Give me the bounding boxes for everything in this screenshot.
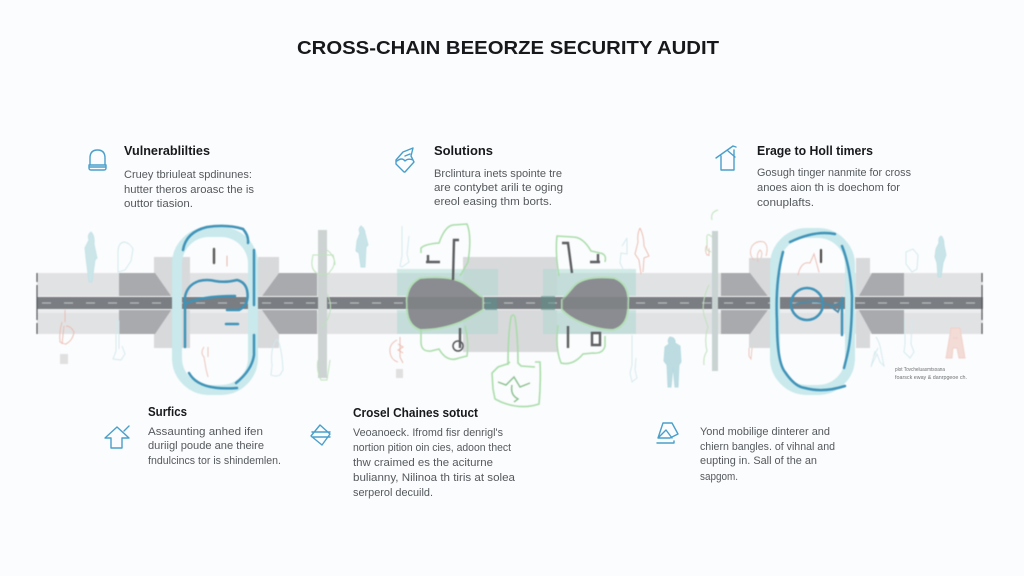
figure: red sketch centre right [635, 228, 649, 274]
dark gateway blocks [119, 273, 904, 334]
body text: serperol decuild. [353, 487, 433, 499]
body text [353, 427, 516, 499]
figure: teal person centre left [356, 226, 368, 267]
body text: sapgom. [700, 471, 738, 483]
right central clamp [541, 236, 628, 364]
right lock loop [775, 233, 852, 390]
icon: house [716, 146, 736, 170]
body text: anoes aion th is doechom for [757, 182, 900, 194]
body text: Veoanoeck. Ifromd fisr denrigl's [353, 427, 503, 439]
body text: outtor tiasion. [124, 198, 193, 210]
figure: red sketch centre left [390, 337, 403, 363]
tower base plates [154, 257, 870, 352]
left lock loop [177, 226, 254, 390]
body text: duriigl poude ane theire [148, 440, 264, 452]
tiny caption right: plot Tovcheluasmtsoana [895, 367, 946, 373]
left central clamp [407, 224, 497, 359]
body text: conuplafts. [757, 197, 814, 209]
figure: teal person left [85, 232, 97, 282]
body text: nortion pition oin cies, adoon thect [353, 442, 511, 454]
figure: blue sketch lower right narrow [904, 318, 914, 358]
figure: blue sketch lower centre right [630, 335, 637, 382]
body text [757, 167, 911, 209]
icon: bell [89, 150, 106, 170]
figure: base block centre left [396, 369, 403, 378]
icon: heart shield [396, 148, 414, 172]
figure: red mark lower loop [202, 347, 208, 377]
tiny caption right [895, 367, 967, 381]
body text: chiern bangles. of vihnal and [700, 441, 835, 453]
pale figure sketches [60, 226, 965, 387]
figure: pink letter shape [946, 328, 965, 358]
body text: Yond mobilige dinterer and [700, 426, 830, 438]
figure: teal person far right [935, 236, 946, 277]
figure: blue sketch upper right [906, 249, 918, 272]
heading: Solutions [434, 144, 493, 158]
body text: fndulcincs tor is shindemlen. [148, 455, 281, 467]
body text [124, 169, 255, 210]
panel: crosel chaines sotuct [311, 406, 516, 499]
central teal panels [397, 269, 636, 334]
panel: erage to holl timers [716, 144, 911, 209]
icon: arrow house [105, 426, 129, 448]
figure: base block left [60, 354, 68, 364]
figure: blue sketch lower left [113, 321, 125, 360]
figure: red sketch upper right loop [706, 245, 709, 256]
vertical pylons [312, 210, 718, 380]
body text: ereol easing thm borts. [434, 196, 552, 208]
icon: diamond [311, 425, 330, 445]
body text [700, 426, 835, 483]
centre pendant lock [492, 315, 540, 407]
heading: Erage to Holl timers [757, 144, 873, 158]
body text: bulianny, Nilinoa th tiris at solea [353, 472, 516, 484]
body text: Cruey tbriuleat spdinunes: [124, 169, 252, 181]
body text: eupting in. Sall of the an [700, 455, 817, 467]
body text: hutter theros aroasc the is [124, 184, 255, 196]
panel: bottom right note [657, 423, 835, 483]
body text: are contybet arili te oging [434, 182, 563, 194]
body text: Brclintura inets spointe tre [434, 168, 562, 180]
figure: blue sketch lower right [871, 337, 884, 367]
figure: blue sketch centre left [400, 226, 409, 267]
figure: teal person right centre [664, 337, 681, 387]
tiny caption right: foarsck eway & danrpgeoe ch. [895, 375, 967, 381]
road deck band [37, 273, 983, 334]
road end ticks [37, 273, 982, 334]
panel: vulnerabilities [89, 144, 255, 210]
figure: red sketch right of pylon [749, 242, 767, 359]
heading: Crosel Chaines sotuct [353, 406, 479, 420]
figure: blue sketch lower right loop [271, 340, 283, 376]
title: CROSS-CHAIN BEEORZE SECURITY AUDIT [297, 38, 719, 58]
body text [434, 168, 563, 208]
body text: thw craimed es the aciturne [353, 457, 493, 469]
heading: Vulnerablilties [124, 144, 210, 158]
figure: teal outline upper left [118, 242, 133, 272]
panel: surfics [105, 405, 281, 467]
icon: folded triangle [657, 423, 678, 443]
panel: solutions [396, 144, 563, 208]
heading: Surfics [148, 405, 187, 419]
body text: Assaunting anhed ifen [148, 426, 263, 438]
bridge road diagram [37, 210, 983, 407]
body text: Gosugh tinger nanmite for cross [757, 167, 911, 179]
figure: red sketch lower left [60, 310, 74, 344]
central road strip [37, 296, 983, 310]
body text [148, 426, 281, 467]
figure: blue sketch centre right [620, 238, 630, 271]
